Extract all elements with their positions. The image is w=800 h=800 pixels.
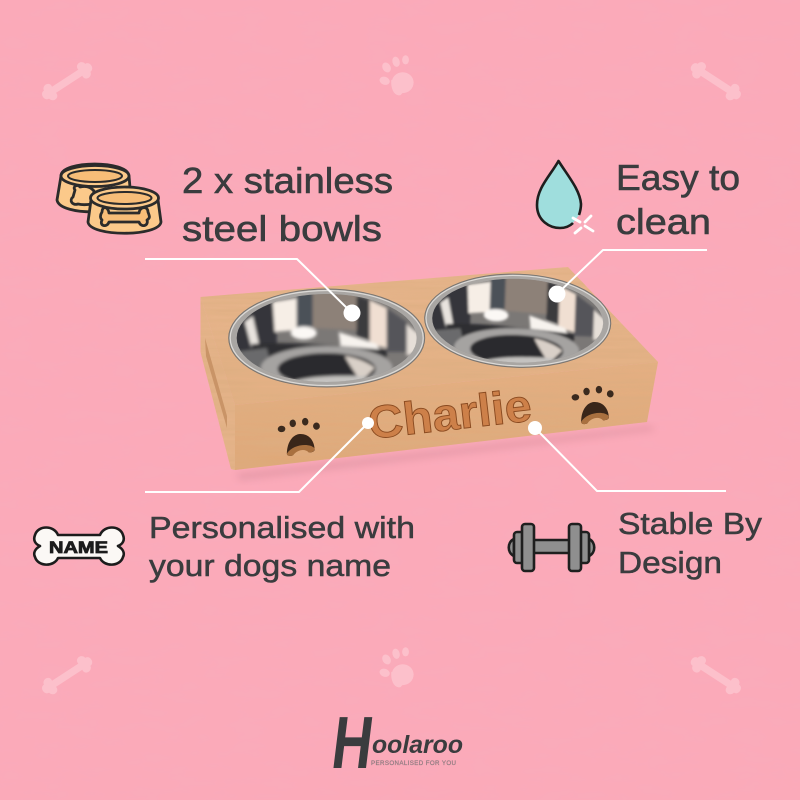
stand front face xyxy=(235,362,658,470)
side handle slot xyxy=(205,338,227,428)
left bowl xyxy=(229,289,425,390)
icon: name bone tag xyxy=(34,528,124,565)
heading: easy to clean: clean xyxy=(616,201,711,242)
icon: water drop xyxy=(537,161,593,233)
logo: Hoolaroo: PERSONALISED FOR YOU xyxy=(371,760,456,767)
heading: bowls xyxy=(182,160,393,249)
heading: stable xyxy=(618,506,763,580)
decorative paw bottom xyxy=(378,647,414,687)
heading: personalised xyxy=(149,510,415,583)
decorative bone bottom left xyxy=(38,652,96,698)
decorative bone top left xyxy=(38,58,96,104)
decorative bone bottom right xyxy=(687,652,745,698)
heading: easy to clean xyxy=(616,157,740,242)
decorative bone top right xyxy=(687,58,745,104)
decorative paw top xyxy=(378,55,414,95)
stand top face xyxy=(200,267,658,405)
logo: Hoolaroo: oolaroo xyxy=(372,731,463,759)
icon: two dog bowls xyxy=(57,164,161,233)
heading: stable: Design xyxy=(618,545,722,580)
heading: personalised: your dogs name xyxy=(149,548,391,583)
callout line: easy to clean xyxy=(548,250,707,302)
icon: name bone tag: NAME xyxy=(49,539,108,557)
callout line: stable xyxy=(528,421,726,491)
heading: personalised: Personalised with xyxy=(149,510,415,545)
heading: stable: Stable By xyxy=(618,506,763,541)
engraved name: Charlie xyxy=(365,379,534,449)
heading: bowls: 2 x stainless xyxy=(182,160,393,201)
stand left side xyxy=(200,297,235,470)
logo: Hoolaroo: H xyxy=(328,701,378,784)
callout line: bowls xyxy=(145,259,360,322)
logo: Hoolaroo xyxy=(328,701,463,784)
icon: dumbbell xyxy=(509,524,594,571)
heading: easy to clean: Easy to xyxy=(616,157,740,198)
right bowl xyxy=(423,271,612,373)
heading: bowls: steel bowls xyxy=(182,208,382,249)
product: bamboo bowl stand xyxy=(200,267,658,480)
left paw cutout xyxy=(277,417,321,457)
right paw cutout xyxy=(571,385,616,425)
callout line: name xyxy=(145,417,374,492)
